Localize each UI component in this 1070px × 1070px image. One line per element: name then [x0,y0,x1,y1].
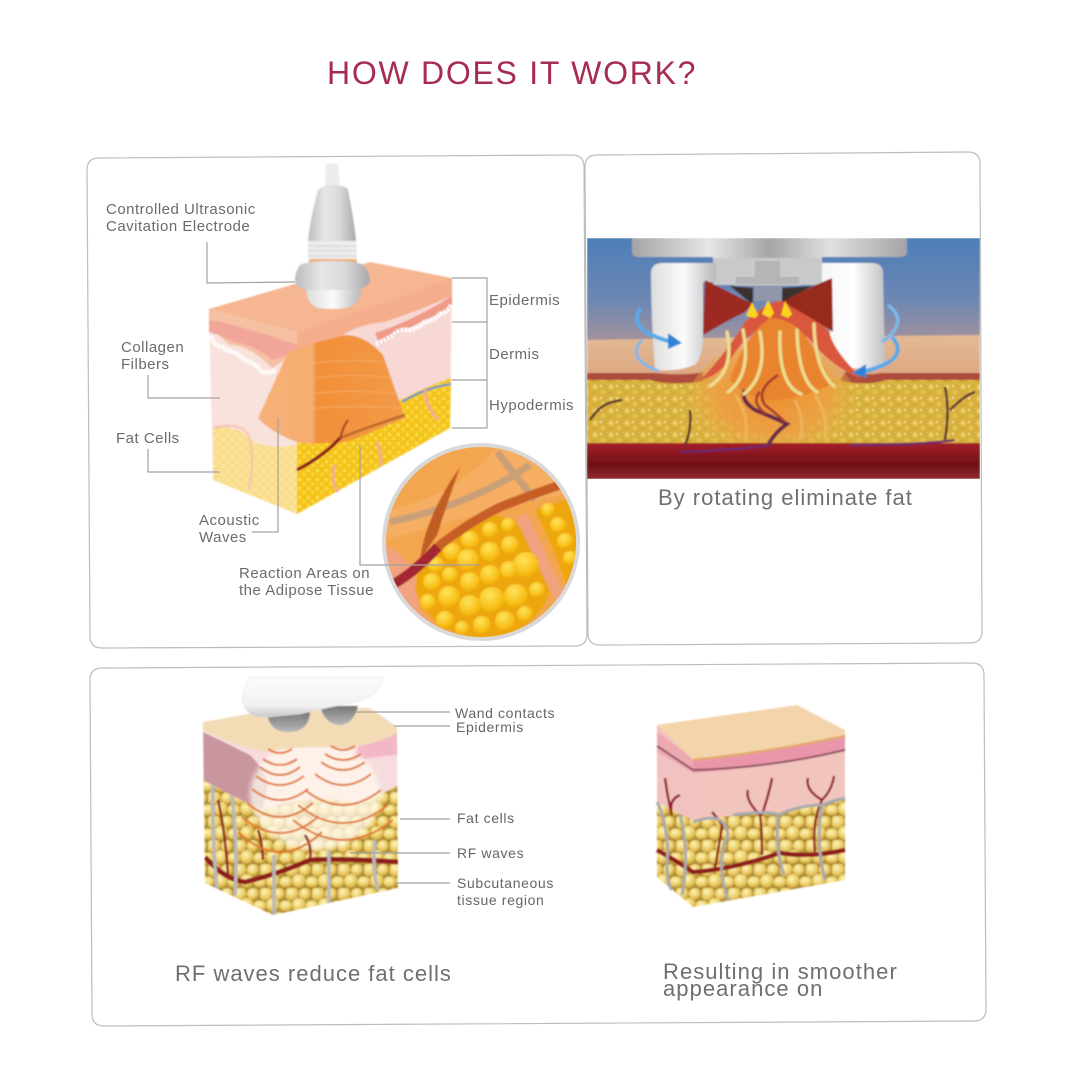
dermis right [693,730,845,830]
yellow heat lines [710,324,834,394]
wand contact right [320,706,358,725]
epidermis band left [209,309,297,368]
panel frame [90,663,986,1026]
leader lines [350,712,450,883]
label: epidermis: Epidermis [489,292,560,309]
pink band [386,545,439,627]
label: reaction areas: the Adipose Tissue [239,582,374,599]
skin surface [587,335,980,380]
pale centre [250,740,380,850]
panel frame [585,152,982,645]
blue vessel [402,384,451,402]
label: dermis: Dermis [489,346,540,363]
center nozzle [754,286,782,301]
probe body [308,185,356,241]
label: reaction areas: Reaction Areas on [239,565,370,582]
dermis left [657,725,693,830]
top face [209,262,452,332]
ridges lines [308,246,357,256]
label: acoustic waves: Acoustic [199,512,260,529]
probe head [306,290,361,309]
label: epidermis: Epidermis [456,719,524,735]
epidermis [203,708,397,752]
fat lobe right [534,499,576,585]
label: RF waves: RF waves [457,845,524,861]
red vessels [205,857,398,882]
circle contents [385,445,580,640]
block body [200,705,400,916]
fat [657,798,845,907]
right roller [822,263,885,369]
label: subcutaneous: tissue region [457,892,544,908]
septum [522,515,565,605]
left face [209,309,297,514]
vessel left [590,387,975,445]
vessel branches [665,776,834,868]
RF wave arcs left [238,749,322,852]
title: HOW DOES IT WORK? [327,55,697,91]
wand contact left [267,712,310,732]
center cup right [782,278,833,332]
caption: smoother: appearance on [663,976,823,1001]
red vessel [297,438,340,470]
dark skin line right [840,372,980,383]
label: electrode: Cavitation Electrode [106,218,250,235]
caption: RF waves: RF waves reduce fat cells [175,961,452,986]
heat glow in fat [690,346,852,443]
right fat layer [297,378,451,514]
red vessels [657,850,845,872]
right rotation arrow [882,305,898,342]
grey septa [657,798,845,900]
top tissue [386,448,563,540]
pink band [693,730,845,773]
tissue disruption mid [756,375,785,422]
pink band left [209,320,297,360]
top surface [657,705,845,760]
left fat layer [213,428,297,514]
grey septa [213,785,378,915]
RF tissue block [200,705,400,916]
left rotation arrow [637,308,672,342]
wand body [242,677,383,717]
fat cells [420,503,577,635]
left roller [651,263,716,370]
left arrow head [668,333,682,349]
rete ridge left [211,336,275,373]
left fat septum [213,426,252,490]
skin block illustration [209,262,452,514]
artery dark root [392,547,438,585]
probe ridges [308,241,357,262]
center dark wedges [730,286,812,305]
raised skin dome [700,300,862,380]
red vessel in cone [340,415,405,438]
label: collagen: Filbers [121,356,170,373]
yellow up arrows [746,300,792,318]
right arrow head [852,364,866,378]
sky background [587,238,980,343]
fat [203,780,398,916]
acoustic cone [258,335,405,444]
label: subcutaneous: Subcutaneous [457,875,554,891]
caption: smoother: Resulting in smoother [663,959,898,984]
fat layer [587,379,980,445]
label: acoustic waves: Waves [199,529,247,546]
purple vessel [680,440,955,452]
orange ring [309,259,357,263]
base tissue [587,443,980,479]
right lower arc [862,337,898,372]
circle outline [384,445,578,639]
pink right [350,733,398,762]
smooth tissue block [657,705,845,907]
center column [713,258,822,285]
label: collagen: Collagen [121,339,184,356]
label: electrode: Controlled Ultrasonic [106,201,256,218]
upper housing [631,238,908,259]
grey strands [390,452,535,522]
dermal septa [333,388,438,492]
icon: ultrasonic probe [295,163,370,309]
dark skin line left [587,372,703,383]
artery branch [420,467,460,560]
magnified tissue circle [384,445,580,640]
left lower arc [636,340,658,371]
pink band left [657,732,693,773]
label: hypodermis: Hypodermis [489,397,574,414]
probe tip [325,163,340,187]
vessel branches [218,800,310,875]
panel: RF waves [90,663,986,1026]
artery [434,482,560,550]
icon: RF wand [242,677,383,732]
streaks [735,395,826,440]
cone bands [298,361,402,410]
center cup left [703,280,753,335]
vessel branch [340,420,348,440]
panel frame [87,155,587,648]
fat mass [415,515,550,640]
panel: ultrasonic cavitation [87,155,587,648]
label: wand contacts: Wand contacts [455,705,555,721]
center bracket [735,260,800,285]
RF wave arcs right [293,746,393,840]
right face [297,278,452,514]
rotating head illustration [587,238,980,479]
dome interior [730,318,830,400]
top edge [693,736,845,760]
basal line [657,746,845,770]
caption: By rotating eliminate fat [658,485,913,510]
probe collar [295,261,370,290]
epidermis band right [297,278,452,352]
label: fat cells: Fat cells [457,810,515,826]
tissue disruption dark [744,390,787,445]
mauve left [203,732,268,810]
label: fat cells: Fat Cells [116,430,180,447]
panel: rotating [585,152,982,645]
dermis [200,705,400,825]
leader lines [148,242,487,565]
pink band right [375,296,452,345]
rete ridge right [376,305,451,344]
